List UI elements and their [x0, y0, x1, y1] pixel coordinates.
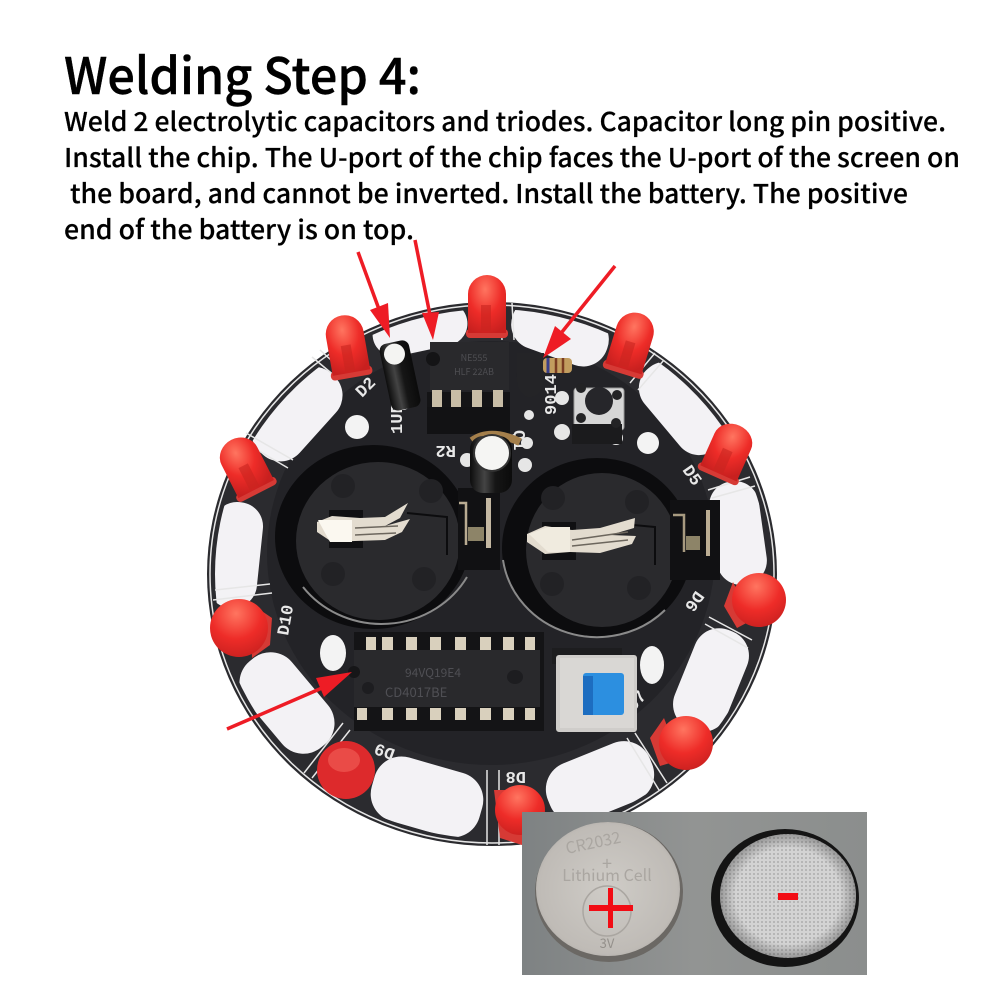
LED top [466, 275, 508, 338]
LED D7 [650, 716, 713, 770]
CD4017 chip in socket [348, 632, 544, 731]
LED left [212, 430, 278, 503]
metal contact [317, 503, 410, 542]
battery holder right [502, 458, 720, 638]
negative side of battery [711, 829, 859, 967]
LED D9 [317, 741, 375, 799]
NE555 chip in socket: HLF 22AB [454, 365, 494, 378]
arrow to CD4017 notch [227, 672, 352, 729]
metal contact [527, 518, 636, 554]
minus sign [778, 893, 798, 900]
silkscreen labels: D2 [353, 374, 381, 402]
solder pads [395, 391, 623, 472]
title: Welding Step 4: [64, 37, 421, 109]
LED D8 [494, 785, 545, 846]
arrow to capacitor [358, 252, 390, 338]
white LED pads [205, 290, 770, 844]
arrow to NE555 notch [415, 240, 439, 340]
instructions text block: Install the chip. The U-port of the chip faces the U-port of the screen on [64, 138, 960, 175]
positive side of battery: 3V [600, 933, 615, 952]
silkscreen labels: D5 [677, 463, 704, 490]
silkscreen labels: 9014 [543, 374, 562, 415]
positive side of battery [535, 822, 683, 962]
side latch [670, 500, 720, 580]
instructions text block [64, 102, 960, 247]
transistor 9014 [517, 353, 544, 397]
NE555 chip in socket: NE555 [461, 351, 487, 364]
silkscreen labels: D9 [372, 737, 398, 762]
mounting holes [320, 415, 664, 684]
resistor behind centre capacitor [472, 435, 520, 442]
arrow to transistor [543, 266, 615, 358]
LED D5 [697, 417, 760, 486]
positive side of battery: CR2032 [563, 824, 623, 859]
inner dark disc [267, 341, 715, 765]
capacitor near centre [470, 435, 512, 493]
capacitor 1uF [378, 339, 422, 412]
plus sign [589, 888, 633, 928]
LED D10 [210, 599, 272, 658]
side latch [458, 488, 500, 570]
positive side of battery: Lithium Cell [562, 862, 652, 886]
silkscreen labels: D7 [624, 688, 652, 716]
silkscreen labels: R2 [436, 440, 456, 459]
circuit board [205, 275, 786, 846]
CD4017 chip in socket: CD4017BE [385, 682, 447, 701]
NE555 chip in socket [426, 342, 510, 434]
LED D6 [724, 573, 786, 628]
battery photo inset [522, 812, 867, 975]
silkscreen labels: D6 [679, 587, 707, 614]
tact switch [572, 383, 624, 444]
silkscreen labels [275, 374, 707, 785]
board disc [207, 302, 777, 846]
LED upper right [602, 307, 660, 380]
silkscreen labels: D10 [275, 604, 299, 637]
battery holder left [275, 445, 500, 629]
board edge line [210, 305, 774, 843]
instructions text block: end of the battery is on top. [64, 210, 414, 247]
silkscreen labels: Q1 [508, 430, 527, 450]
positive side of battery: + [602, 850, 612, 876]
silkscreen labels: 1UF [389, 403, 408, 434]
CD4017 chip in socket: 94VQ19E4 [405, 664, 461, 681]
instructions text block: Weld 2 electrolytic capacitors and triodes. Capacitor long pin positive. [64, 102, 946, 139]
resistor [543, 358, 572, 373]
silkscreen labels: D8 [506, 766, 526, 785]
pad separator lines [213, 303, 755, 845]
LED D2 [321, 312, 373, 381]
instructions text block: the board, and cannot be inverted. Install the battery. The positive [70, 174, 908, 211]
blue latch switch [552, 648, 637, 732]
